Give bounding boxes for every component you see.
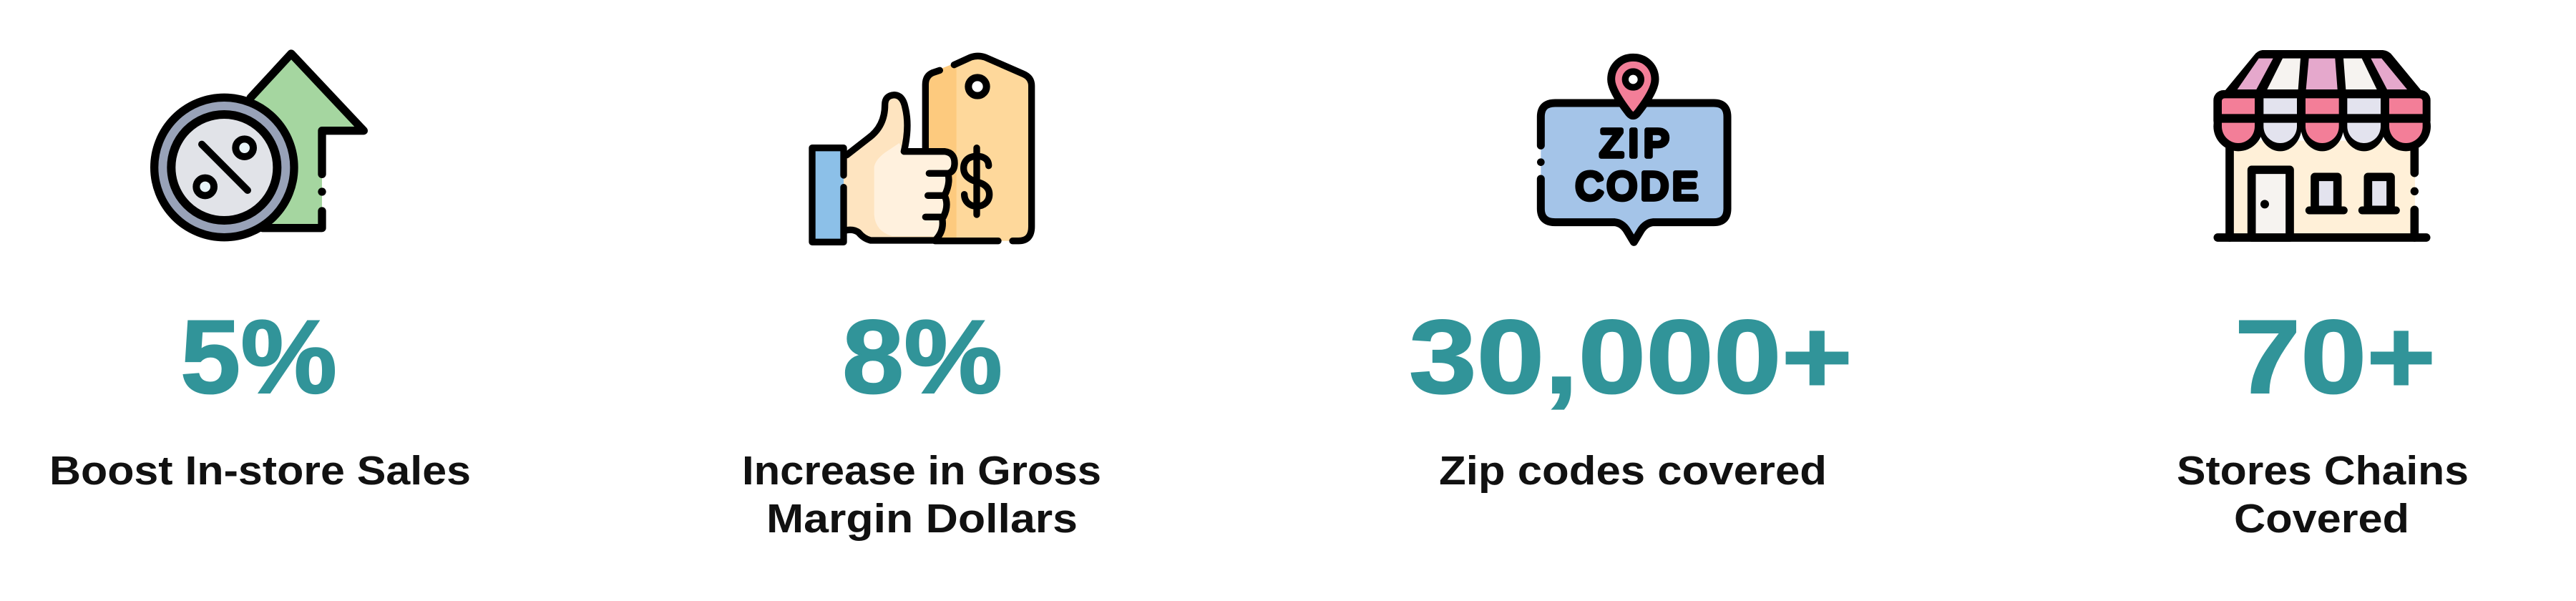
label: stores chains covered: Stores Chains [2177, 448, 2469, 494]
stat: 5%: 5% [180, 298, 337, 415]
label: increase in gross margin dollars [742, 448, 1101, 542]
icon: zip code speech bubble with pin: CODE [1576, 166, 1698, 208]
label: increase in gross margin dollars: Margin Dollars [766, 496, 1078, 542]
panel: zip codes covered [1409, 57, 1853, 494]
label: boost in-store sales: Boost In-store Sales [49, 448, 471, 494]
stat: 70+: 70+ [2235, 298, 2436, 415]
stat: 8%: 8% [842, 298, 1002, 415]
icon: percent coin with up arrow [155, 54, 364, 238]
panel: boost in-store sales [49, 54, 471, 494]
icon: zip code speech bubble with pin: ZIP [1600, 123, 1669, 165]
icon: thumbs up with price tag [812, 56, 1032, 242]
label: stores chains covered: Covered [2234, 496, 2409, 542]
label: zip codes covered: Zip codes covered [1439, 448, 1827, 494]
panel: increase in gross margin dollars [742, 56, 1101, 542]
icon: storefront with awning [2213, 50, 2431, 238]
label: stores chains covered [2177, 448, 2469, 542]
stat: 30,000+: 30,000+ [1409, 298, 1853, 415]
icon: zip code speech bubble with pin [1537, 57, 1727, 242]
label: increase in gross margin dollars: Increase in Gross [742, 448, 1101, 494]
panel: stores chains covered [2177, 50, 2469, 542]
